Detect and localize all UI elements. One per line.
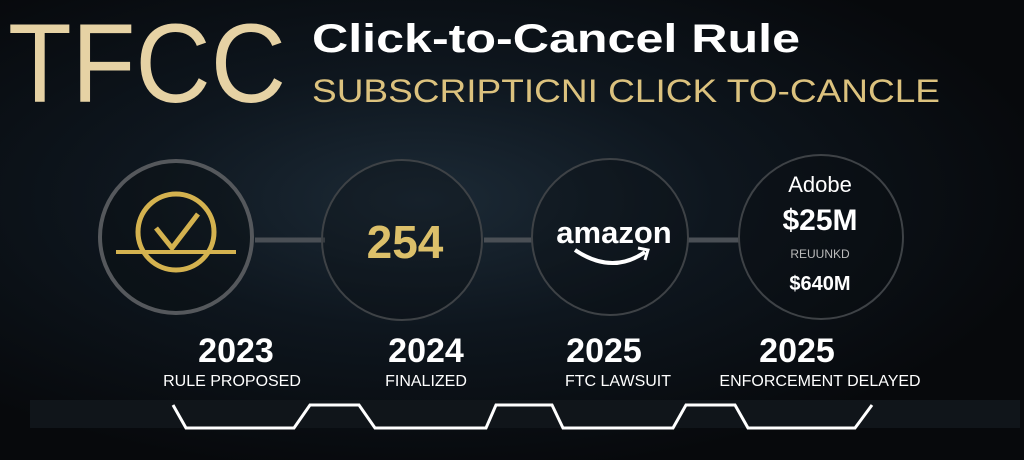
milestone 4: Adobe [739, 155, 903, 319]
icon: gold check [116, 194, 236, 270]
milestone 2: 254: 254 [367, 216, 444, 268]
years and labels: FTC LAWSUIT [565, 373, 671, 390]
bottom zigzag line [30, 400, 1020, 428]
years and labels: RULE PROPOSED [163, 373, 301, 390]
milestone 4: Adobe: Adobe [788, 172, 852, 197]
milestone 4: Adobe: $640M [789, 273, 851, 295]
subtitle: SUBSCRIPTICNI CLICK TO-CANCLE [312, 73, 940, 109]
milestone 2: 254 [322, 160, 482, 320]
years and labels [163, 332, 921, 390]
title logo TFCC: TFCC [8, 1, 286, 126]
years and labels: 2025 [759, 332, 835, 370]
years and labels: 2025 [566, 332, 642, 370]
years and labels: ENFORCEMENT DELAYED [719, 373, 921, 390]
milestone 3: amazon: amazon [556, 215, 672, 250]
years and labels: 2024 [388, 332, 464, 370]
years and labels: FINALIZED [385, 373, 467, 390]
milestone 1: checkmark [100, 161, 252, 313]
years and labels: 2023 [198, 332, 274, 370]
milestone 4: Adobe: REUUNKD [790, 247, 850, 261]
main heading: Click-to-Cancel Rule [312, 17, 800, 61]
milestone 4: Adobe: $25M [782, 204, 858, 237]
connector lines [255, 238, 740, 242]
milestone 3: amazon [532, 159, 688, 315]
